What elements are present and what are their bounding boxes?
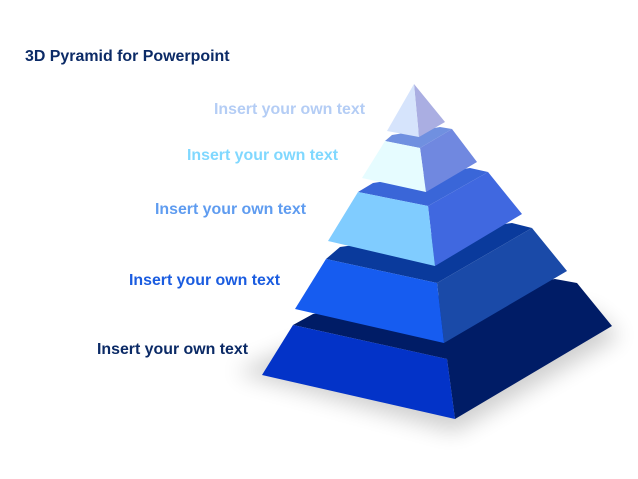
tier 2: [362, 127, 477, 192]
tier 5: base: [262, 279, 612, 419]
label: tier 2: Insert your own text: [187, 147, 339, 164]
tier 3: [328, 168, 522, 266]
title: 3D Pyramid for Powerpoint: [25, 48, 230, 65]
label: tier 4: Insert your own text: [129, 272, 281, 289]
pyramid: [262, 84, 612, 419]
tier 4: [295, 223, 567, 343]
pyramid shadow: [235, 310, 620, 432]
label: tier 3: Insert your own text: [155, 201, 307, 218]
tier 1: apex: [387, 84, 445, 137]
label: tier 5: Insert your own text: [97, 341, 249, 358]
label: tier 1: Insert your own text: [214, 101, 366, 118]
